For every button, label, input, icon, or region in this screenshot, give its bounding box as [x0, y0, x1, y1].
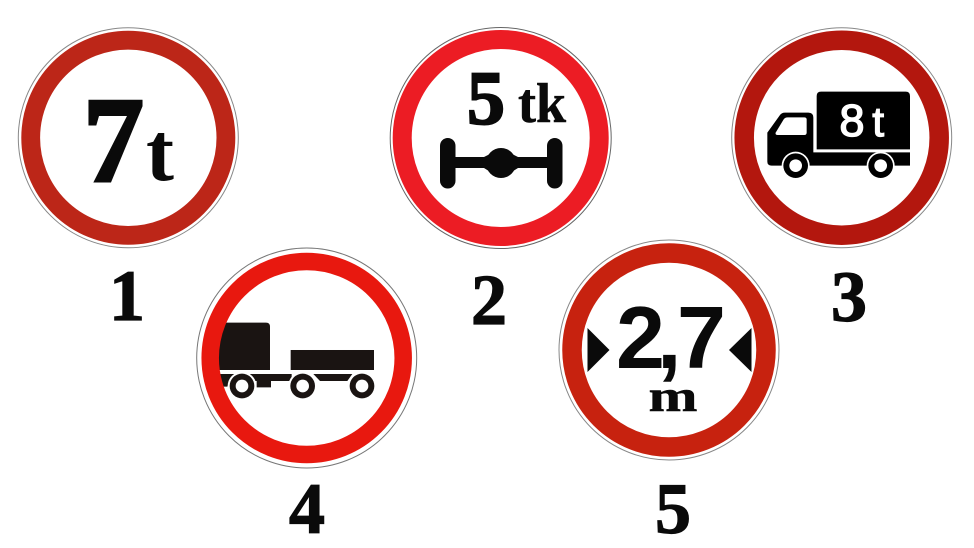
sign 4 ring — [210, 262, 403, 454]
sign 5 value: 7 — [677, 288, 726, 387]
label 2: 2 — [471, 260, 507, 340]
sign 5 value: 2 — [616, 288, 665, 387]
truck load text: t — [872, 98, 884, 145]
label 5: 5 — [655, 469, 691, 548]
icon: truck — [767, 92, 910, 180]
icon: truck with trailer — [213, 323, 376, 400]
sign 3: truck 8 t limit — [732, 28, 952, 248]
sign 1: 7 t weight limit — [18, 28, 238, 248]
sign 1 text — [83, 73, 174, 208]
sign 4: truck with trailer prohibited — [197, 248, 417, 468]
sign 2: 5 tk axle limit — [390, 28, 611, 248]
sign 2 text: 5 — [467, 57, 505, 141]
sign 2 text — [467, 57, 567, 141]
icon: axle — [440, 138, 562, 188]
sign 1 text: 7 — [83, 73, 144, 208]
sign 5: 2,7 m width limit — [559, 240, 779, 460]
sign 5 unit: m — [648, 372, 698, 421]
truck load text: 8 — [839, 95, 865, 146]
right width arrow — [729, 328, 752, 372]
sign 1 text: t — [146, 106, 174, 199]
sign 5 value: , — [657, 288, 681, 387]
label 4: 4 — [289, 469, 325, 548]
sign 5 value — [616, 288, 726, 387]
label 3: 3 — [831, 257, 867, 337]
label 1: 1 — [109, 256, 145, 336]
sign 2 text: tk — [518, 73, 567, 135]
left width arrow — [588, 328, 610, 372]
truck load text — [839, 95, 884, 146]
